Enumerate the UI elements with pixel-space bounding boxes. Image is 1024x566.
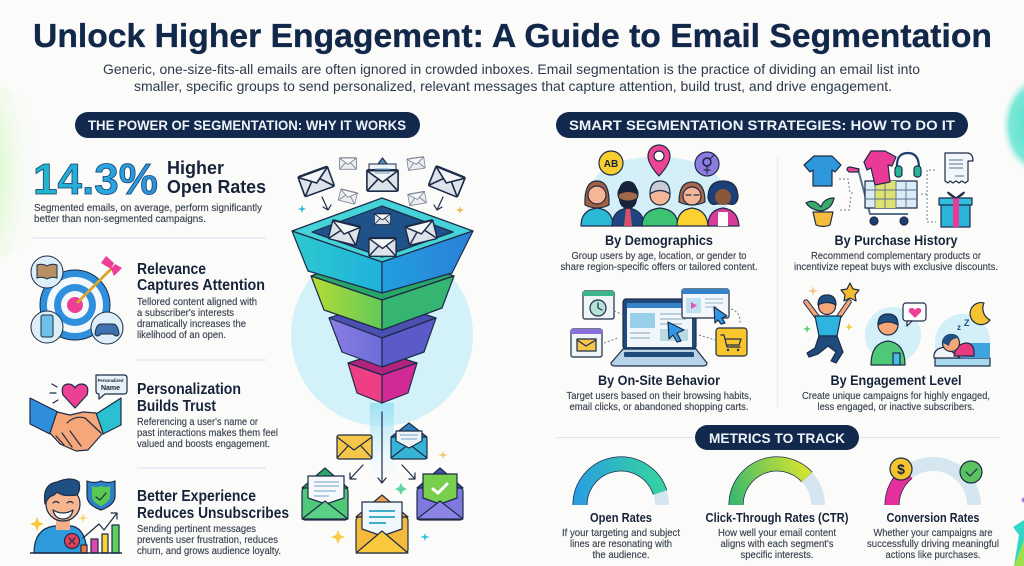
text: personalization builds trust: Personalization — [137, 381, 241, 398]
text: relevance captures attention: a subscriber's interests — [137, 308, 234, 319]
funnel tier: teal opening — [292, 198, 473, 293]
envelope: purple with check — [417, 468, 463, 520]
text: relevance captures attention: dramatically increases the — [137, 319, 246, 330]
section header: smart segmentation strategies: SMART SEGMENTATION STRATEGIES: HOW TO DO IT — [569, 117, 955, 133]
intro paragraph: smaller, specific groups to send personalized, relevant messages that capture attention, build trust, and drive engagement. — [134, 78, 892, 94]
arrows out of funnel to segments — [350, 412, 415, 483]
badge: location pin — [648, 145, 670, 176]
stat block: 14.3% higher open rates — [33, 155, 266, 225]
icon: happy subscriber with shield and growth chart — [30, 479, 122, 553]
metric: click-through rates: How well your email content — [718, 528, 836, 539]
card: by engagement level — [802, 283, 990, 413]
card: by engagement level: Create unique campaigns for highly engaged, — [802, 391, 990, 402]
stat block: 14.3% higher open rates: Open Rates — [167, 177, 266, 197]
text: personalization builds trust — [137, 381, 278, 450]
text: relevance captures attention: likelihood of an open. — [137, 330, 226, 341]
metric: click-through rates — [706, 464, 848, 561]
section header: metrics to track — [695, 425, 859, 450]
incoming envelopes above funnel — [298, 157, 465, 214]
metric: conversion rates — [867, 458, 999, 561]
illustration: sleeping inactive user — [934, 303, 990, 366]
card: by on-site behavior: Target users based on their browsing habits, — [566, 391, 752, 402]
envelope: large yellow open — [356, 495, 408, 553]
metric: click-through rates: specific interests. — [740, 550, 814, 561]
stat block: 14.3% higher open rates: better than non-segmented campaigns. — [34, 214, 206, 225]
illustration: laptop with windows — [571, 289, 747, 366]
metric: click-through rates: aligns with each segment's — [720, 539, 834, 550]
section header: the power of segmentation — [75, 112, 420, 138]
stat block: 14.3% higher open rates: Higher — [167, 158, 224, 178]
card: by engagement level: By Engagement Level — [830, 372, 962, 388]
text: better experience reduces unsubscribes: churn, and grows audience loyalty. — [137, 546, 281, 557]
metric: open rates: lines are resonating with — [570, 539, 672, 550]
metric: open rates: If your targeting and subject — [562, 528, 680, 539]
person 4 — [677, 182, 708, 226]
text: relevance captures attention: Captures Attention — [137, 277, 265, 294]
metric: click-through rates: Click-Through Rates (CTR) — [706, 511, 848, 525]
stat block: 14.3% higher open rates: 14.3% — [33, 155, 158, 204]
icon: handshake with heart and name bubble — [30, 375, 127, 451]
person 2 — [612, 181, 644, 226]
funnel tier: purple — [329, 300, 436, 367]
card: by on-site behavior: By On-Site Behavior — [598, 372, 720, 388]
icon: coin: $ — [897, 461, 905, 477]
title: Unlock Higher Engagement: A Guide to Email Segmentation — [33, 17, 992, 54]
gauge: conversion rates — [892, 464, 974, 505]
icon: handshake with heart and name bubble: Personalized — [98, 378, 124, 383]
illustration: shopping cart and products — [804, 151, 973, 227]
icon: handshake with heart and name bubble: Name — [101, 385, 120, 392]
card: by demographics: By Demographics — [605, 232, 713, 248]
stat block: 14.3% higher open rates: Segmented emails, on average, perform significantly — [34, 203, 263, 214]
card: by engagement level: less engaged, or inactive subscribers. — [818, 402, 974, 413]
text: better experience reduces unsubscribes: Sending pertinent messages — [137, 524, 256, 535]
card: by demographics: Group users by age, location, or gender to — [572, 251, 747, 262]
illustration: group of people — [581, 157, 739, 226]
person 1 — [581, 181, 613, 226]
metric: open rates: the audience. — [592, 550, 650, 561]
text: relevance captures attention: Tellored content aligned with — [137, 297, 257, 308]
envelope: green with letter — [302, 468, 348, 520]
badge: age: AB — [604, 159, 618, 170]
person 5 — [708, 181, 739, 226]
text: better experience reduces unsubscribes: Better Experience — [137, 488, 256, 505]
envelope: small yellow — [337, 435, 372, 459]
metric: conversion rates: successfully driving meaningful — [867, 539, 999, 550]
metric: conversion rates: Conversion Rates — [886, 511, 980, 525]
badge: gender — [695, 152, 719, 176]
section header: the power of segmentation: THE POWER OF SEGMENTATION: WHY IT WORKS — [88, 117, 406, 133]
funnel illustration — [291, 198, 473, 478]
badge: age — [599, 151, 623, 175]
metric: open rates — [562, 464, 680, 561]
illustration: sleeping inactive user: Z — [964, 318, 970, 328]
icon: check badge — [960, 461, 982, 483]
envelope: small blue open — [391, 423, 427, 459]
funnel tier: pink — [348, 352, 417, 403]
text: personalization builds trust: Referencing a user's name or — [137, 417, 259, 428]
card: by on-site behavior: email clicks, or abandoned shopping carts. — [570, 402, 748, 413]
card: by purchase history — [794, 151, 998, 273]
card: by purchase history: incentivize repeat buys with exclusive discounts. — [794, 262, 998, 273]
text: personalization builds trust: Builds Trust — [137, 398, 216, 415]
text: better experience reduces unsubscribes — [137, 488, 289, 557]
funnel tier: green — [311, 250, 454, 330]
card: by on-site behavior — [566, 289, 752, 413]
envelopes inside funnel — [328, 213, 437, 256]
card: by purchase history: By Purchase History — [834, 232, 958, 248]
card: by purchase history: Recommend complementary products or — [811, 251, 982, 262]
text: better experience reduces unsubscribes: prevents user frustration, reduces — [137, 535, 278, 546]
card: by demographics — [560, 145, 758, 273]
text: better experience reduces unsubscribes: Reduces Unsubscribes — [137, 505, 289, 522]
gauge: click-through rates — [736, 464, 818, 505]
section header: metrics to track: METRICS TO TRACK — [709, 430, 845, 446]
intro paragraph: Generic, one-size-fits-all emails are often ignored in crowded inboxes. Email segmentation is the practice of dividing an email list into — [103, 61, 920, 77]
text: relevance captures attention: Relevance — [137, 261, 206, 278]
metric: open rates: Open Rates — [590, 511, 652, 525]
icon: target with arrow and interest bubbles — [31, 256, 123, 344]
intro paragraph — [103, 61, 920, 94]
gauge: open rates — [580, 464, 662, 505]
icon: segmented envelopes — [302, 423, 463, 553]
illustration: sleeping inactive user: z — [957, 323, 961, 332]
section header: smart segmentation strategies — [556, 112, 968, 138]
metric: conversion rates: Whether your campaigns are — [874, 528, 993, 539]
illustration: moderately engaged user — [865, 303, 926, 365]
card: by demographics: share region-specific offers or tailored content. — [560, 262, 758, 273]
person 3 — [642, 181, 678, 226]
text: personalization builds trust: past interactions makes them feel — [137, 428, 278, 439]
text: personalization builds trust: valued and boosts engagement. — [137, 439, 270, 450]
illustration: jumping engaged user — [803, 283, 859, 363]
metric: conversion rates: actions like purchases. — [886, 550, 980, 561]
text: relevance captures attention — [137, 261, 265, 341]
